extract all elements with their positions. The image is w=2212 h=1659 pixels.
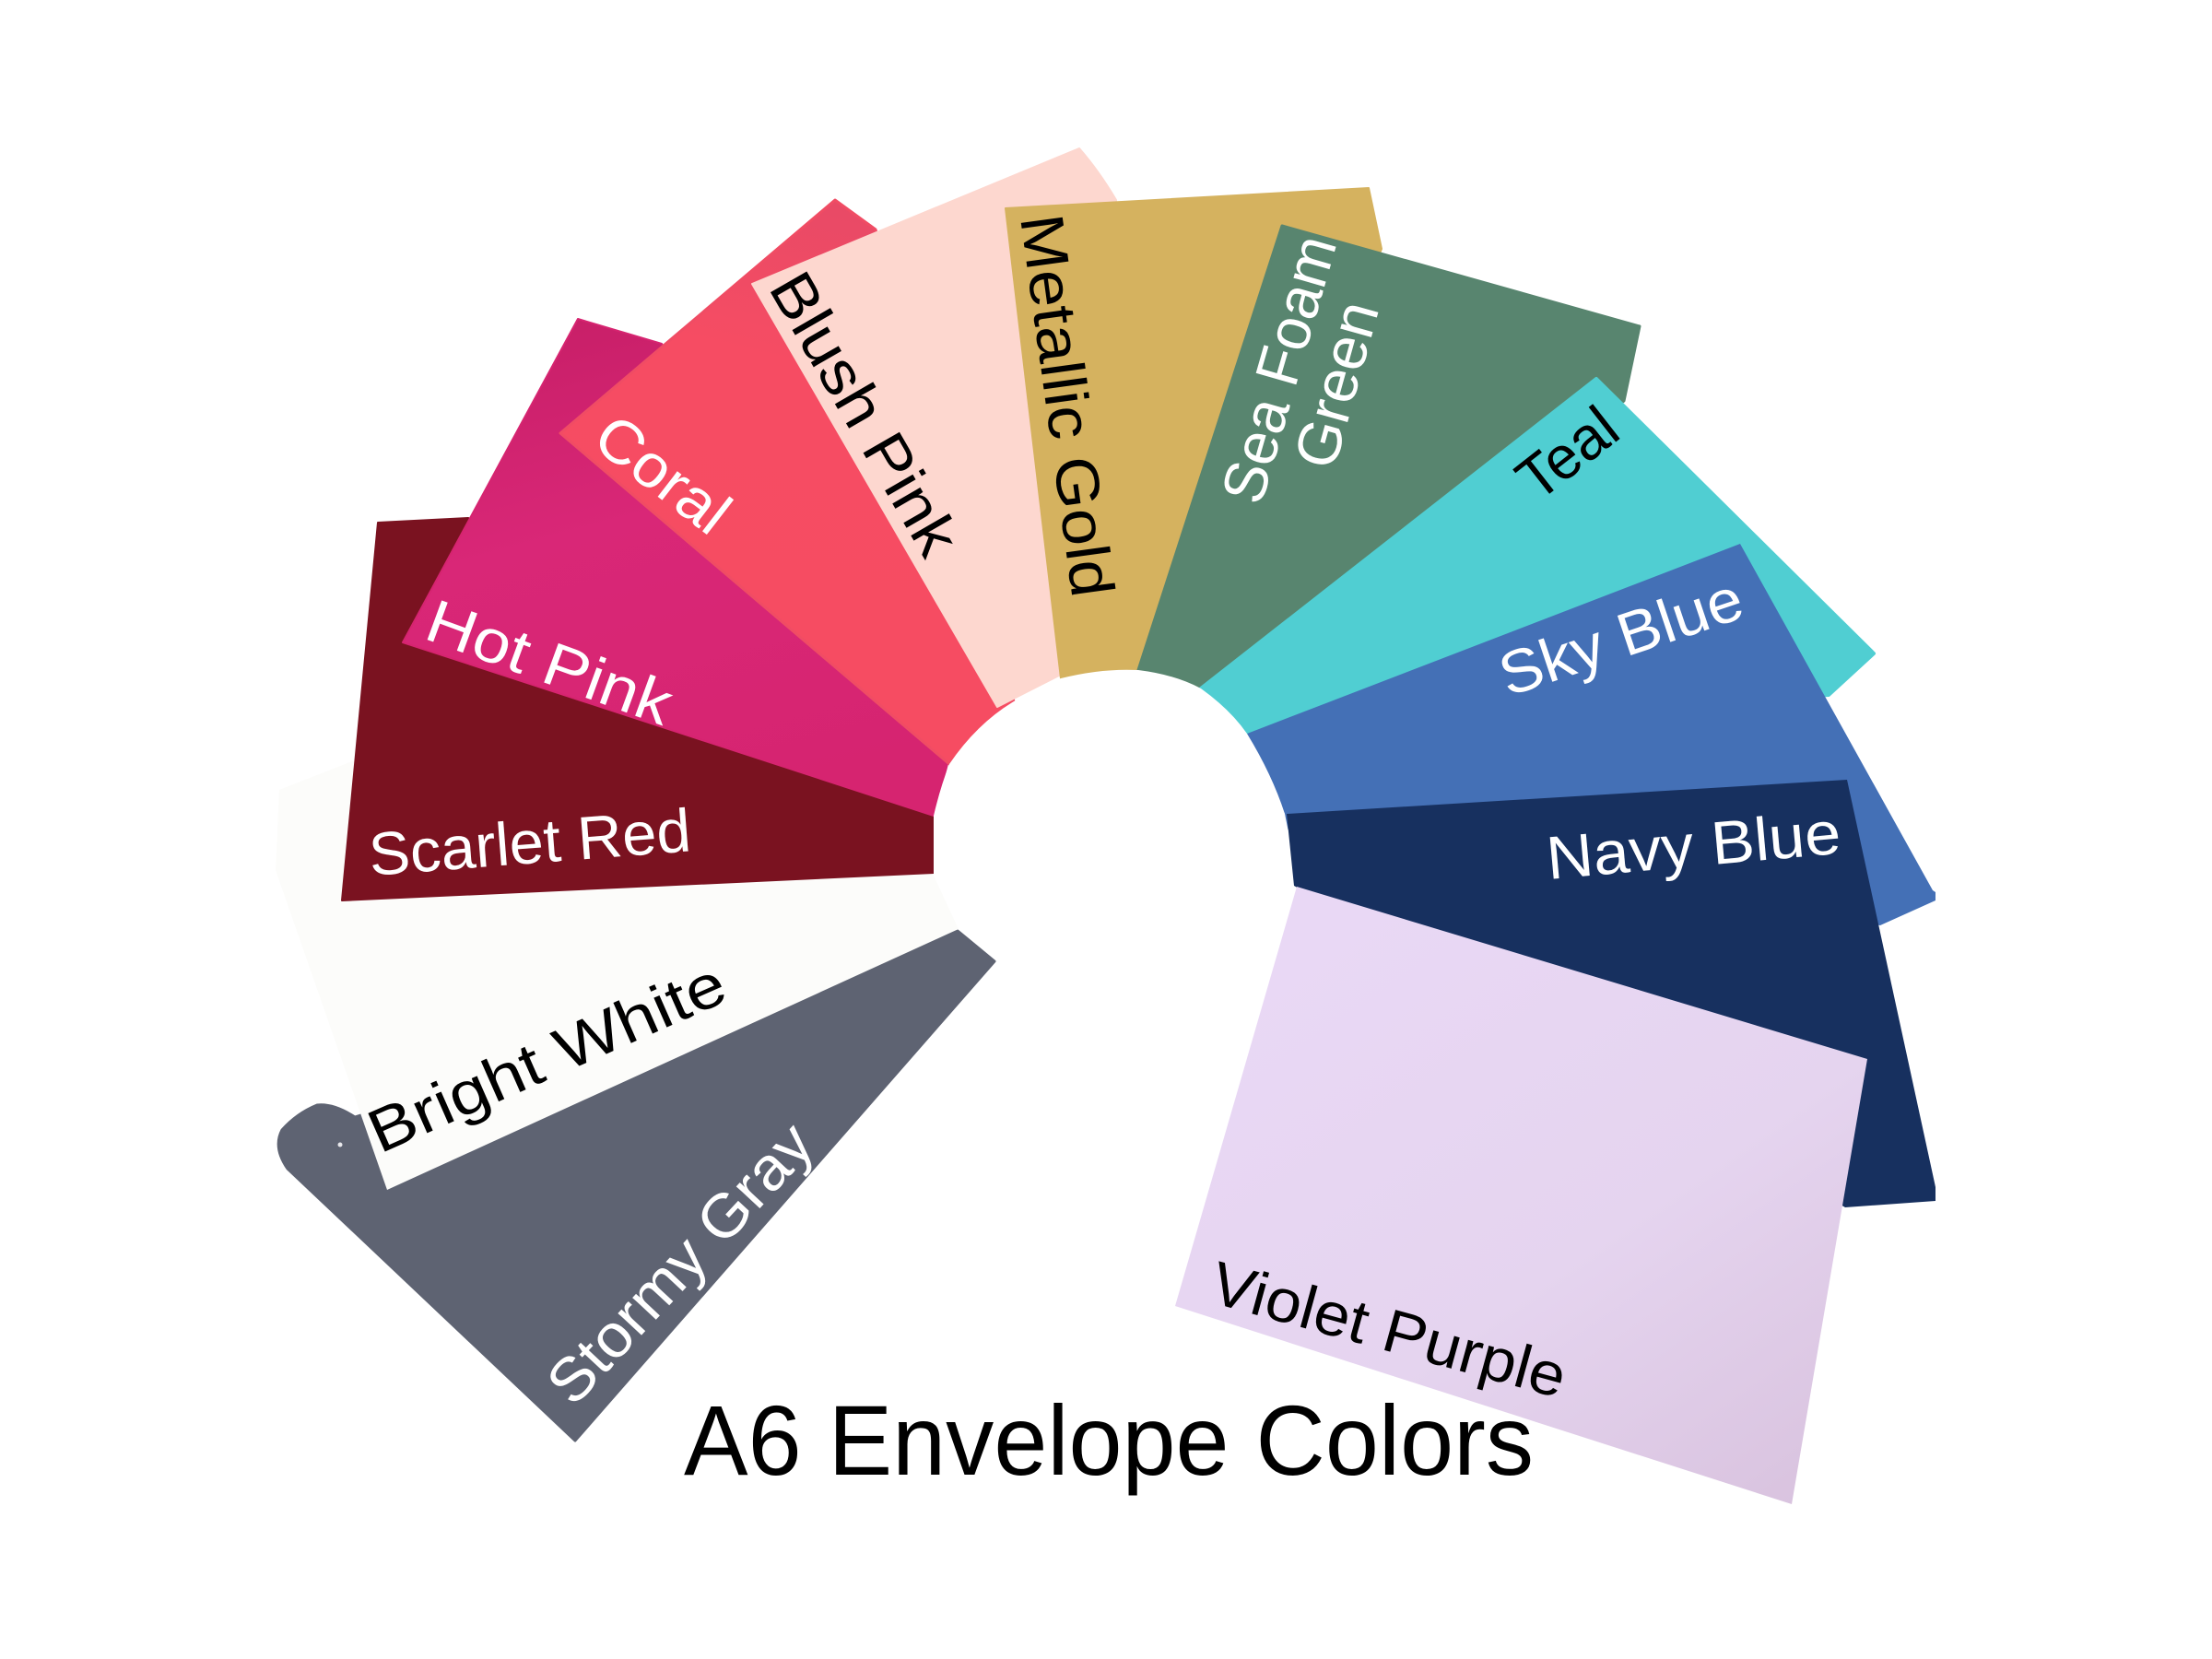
envelope: Violet Purple xyxy=(1175,887,1867,1504)
envelope: Bright White xyxy=(276,761,959,1190)
envelope: Coral xyxy=(560,200,1014,764)
envelope: Teal: Teal xyxy=(1503,393,1631,513)
envelope: Teal xyxy=(1201,379,1874,734)
envelope: Sea Foam Green: Green xyxy=(1280,294,1392,476)
envelope: Hot Pink: Hot Pink xyxy=(418,586,683,738)
envelope: Violet Purple: Violet Purple xyxy=(1204,1248,1574,1411)
envelope: Metallic Gold: Metallic Gold xyxy=(1007,210,1127,601)
envelope: Sky Blue xyxy=(1247,544,1936,925)
envelope: Stormy Gray: Stormy Gray xyxy=(533,1109,827,1418)
envelope: Scarlet Red xyxy=(342,518,934,900)
envelope: Sky Blue: Sky Blue xyxy=(1490,564,1751,709)
title: A6 Envelope Colors xyxy=(684,1384,1534,1496)
envelope: Navy Blue: Navy Blue xyxy=(1544,798,1843,892)
envelope: Navy Blue xyxy=(1287,780,1936,1207)
envelope: Hot Pink xyxy=(403,319,947,816)
center cutout xyxy=(934,670,1300,1014)
envelope: Coral: Coral xyxy=(582,401,744,547)
envelope: Metallic Gold xyxy=(1006,188,1382,700)
envelope: Blush Pink xyxy=(752,148,1116,707)
envelope: Bright White: Bright White xyxy=(358,948,735,1166)
envelope: Scarlet Red: Scarlet Red xyxy=(366,795,693,888)
envelope: Stormy Gray xyxy=(278,931,994,1441)
envelope: Sea Foam Green: Sea Foam xyxy=(1207,228,1349,511)
envelope: Blush Pink: Blush Pink xyxy=(757,260,974,568)
envelope: Sea Foam Green xyxy=(1138,226,1640,688)
